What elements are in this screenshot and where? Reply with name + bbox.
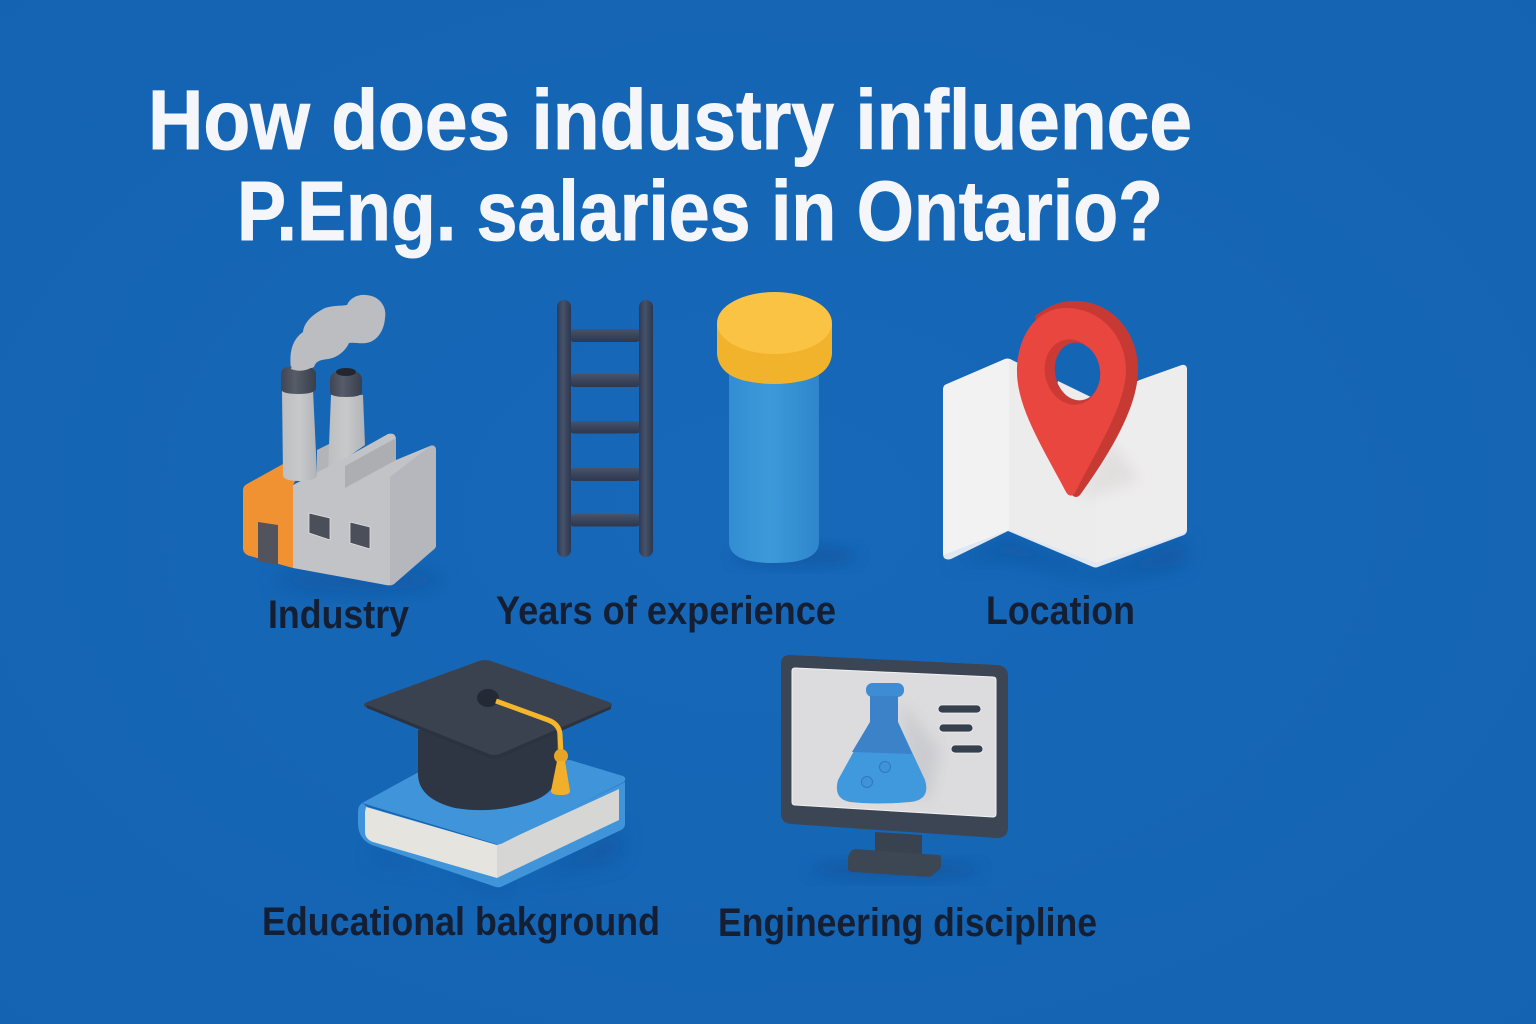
icon: factory [243,295,445,591]
title [148,73,1192,258]
icon: ladder [557,300,653,557]
icon: graduation cap on book [358,660,625,890]
label: engineering discipline: Engineering discipline [718,901,1097,945]
title: How does industry influence [148,73,1192,167]
title: P.Eng. salaries in Ontario? [237,164,1163,258]
label: years of experience: Years of experience [496,589,836,633]
label: educational background: Educational bakground [262,900,660,944]
icon: monitor with flask [781,655,1008,880]
label: industry: Industry [268,593,410,637]
icon: salary column [717,292,857,567]
icon: map pin [943,301,1188,580]
label: location: Location [986,589,1135,633]
